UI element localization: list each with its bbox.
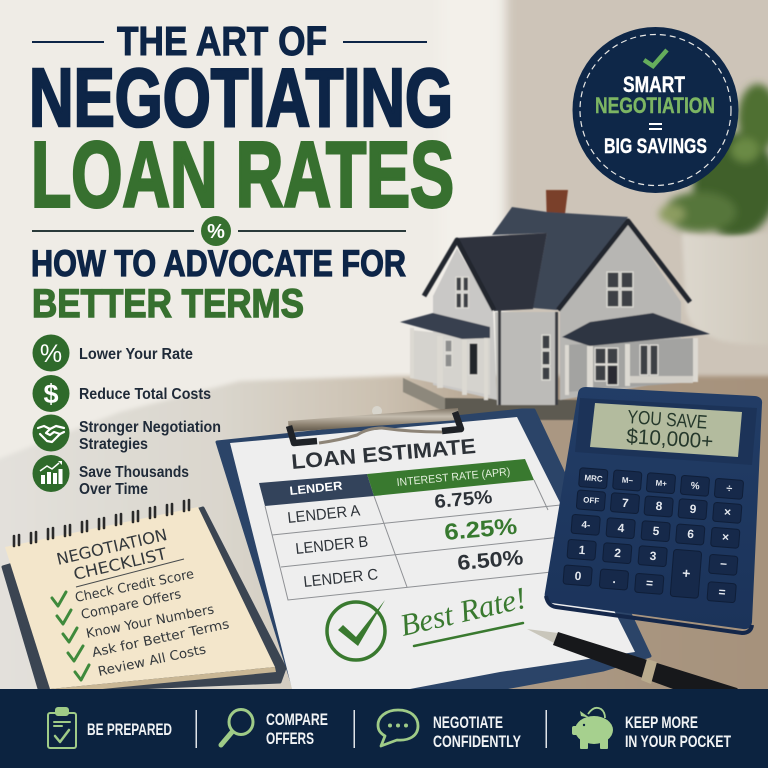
checklist check marks <box>52 592 89 680</box>
house: walls <box>433 248 497 400</box>
icon: green check circle <box>327 600 385 660</box>
icon: handshake <box>38 426 64 442</box>
house: windows <box>445 272 658 385</box>
calculator keys <box>563 468 744 603</box>
benefits list <box>32 334 221 498</box>
house: right porch roof <box>562 313 710 346</box>
model house <box>400 190 710 420</box>
checklist items: Ask for Better Terms <box>91 617 231 661</box>
calculator <box>545 387 762 633</box>
benefit: stronger negotiation strategies: Stronger Negotiation <box>79 419 221 436</box>
icon: badge check <box>644 50 667 66</box>
notepad heading: CHECKLIST <box>72 544 169 584</box>
benefit: reduce total costs: Reduce Total Costs <box>79 386 211 403</box>
benefit: lower your rate: % <box>40 340 62 368</box>
percent divider <box>32 216 406 246</box>
banner item: be prepared <box>48 708 172 748</box>
row: lender c: 6.50% <box>456 546 525 575</box>
badge text: BIG SAVINGS <box>604 135 707 158</box>
banner item: negotiate confidently <box>378 710 521 751</box>
benefit: save thousands over time: Over Time <box>79 481 148 498</box>
calculator screen: $10,000+ <box>626 425 714 453</box>
badge text <box>595 72 715 158</box>
row: lender b: LENDER B <box>295 533 369 558</box>
calculator screen <box>590 403 742 457</box>
calculator key labels: − <box>720 557 728 571</box>
best rate label: Best Rate! <box>397 580 529 643</box>
row: lender b: 6.25% <box>443 513 518 545</box>
badge: smart negotiation equals big savings <box>572 27 738 193</box>
title line 2: NEGOTIATING <box>29 51 453 144</box>
house: left porch roof <box>400 313 490 339</box>
banner item: compare offers: OFFERS <box>266 729 314 748</box>
icon: growth chart <box>40 461 62 484</box>
house: right porch wall <box>565 338 693 392</box>
house: chimney <box>546 190 568 228</box>
calculator key labels: 7 <box>621 496 630 510</box>
benefit: save thousands over time: Save Thousands <box>79 464 189 481</box>
calculator key labels: % <box>690 481 700 492</box>
calculator key labels: MRC <box>584 473 603 484</box>
calculator key labels: 5 <box>652 524 660 538</box>
rate header text: INTEREST RATE (APR) <box>396 466 511 489</box>
title block <box>29 18 454 326</box>
notepad <box>3 500 285 694</box>
checklist items: Check Credit Score <box>74 567 195 606</box>
house: roof edges <box>424 221 690 310</box>
banner item: negotiate confidently: NEGOTIATE <box>433 713 503 732</box>
checklist items <box>74 567 231 680</box>
clipboard <box>217 406 650 689</box>
benefit: stronger negotiation strategies <box>32 414 221 453</box>
row: lender b <box>295 513 518 558</box>
calculator display bezel <box>575 398 757 465</box>
icon: speech bubble <box>378 710 418 746</box>
calculator key labels: 4 <box>617 521 625 535</box>
benefit: lower your rate <box>32 334 193 372</box>
calculator key labels: 1 <box>578 543 586 557</box>
rate comparison table <box>259 459 580 600</box>
icon: magnifier <box>221 710 253 745</box>
calculator key labels: = <box>718 585 726 599</box>
notepad paper <box>5 507 275 689</box>
calculator key labels: . <box>612 572 617 586</box>
checklist items: Review All Costs <box>97 642 208 680</box>
banner item: negotiate confidently: CONFIDENTLY <box>433 732 521 751</box>
percent divider: % <box>207 221 225 243</box>
house: back roof <box>492 207 628 310</box>
notepad heading <box>55 525 184 587</box>
clipboard board <box>217 410 650 689</box>
calculator key labels: × <box>722 530 730 544</box>
banner item: compare offers: COMPARE <box>266 710 328 729</box>
heading: loan estimate: LOAN ESTIMATE <box>290 435 477 474</box>
title line 3: LOAN RATES <box>31 122 454 226</box>
plant and pot <box>659 84 768 345</box>
calculator key labels: + <box>682 565 691 581</box>
calculator key labels <box>574 473 733 599</box>
row: lender a <box>287 487 493 527</box>
calculator key labels: 9 <box>689 502 697 516</box>
banner item: keep more in your pocket: KEEP MORE <box>625 713 698 732</box>
house: left roof <box>457 233 547 311</box>
subtitle line 2: BETTER TERMS <box>32 282 304 326</box>
benefit: save thousands over time <box>32 455 189 498</box>
subtitle line 1: HOW TO ADVOCATE FOR <box>31 243 406 284</box>
house: left porch wall <box>410 330 490 395</box>
notepad spiral rings <box>14 500 189 546</box>
calculator key labels: OFF <box>583 495 600 506</box>
calculator key labels: 8 <box>655 499 663 513</box>
notepad heading: NEGOTIATION <box>55 525 169 569</box>
banner item: compare offers <box>221 710 328 748</box>
calculator key labels: 3 <box>649 549 657 563</box>
icon: clipboard <box>48 708 76 748</box>
bottom banner <box>0 689 768 768</box>
checklist items: Compare Offers <box>80 587 183 623</box>
calculator key labels: × <box>724 505 732 519</box>
calculator body <box>545 387 762 629</box>
calculator key labels: 2 <box>614 546 622 560</box>
calculator key labels: ÷ <box>726 483 733 495</box>
banner item: be prepared: BE PREPARED <box>87 720 172 739</box>
title line 1: THE ART OF <box>117 18 327 64</box>
table header: lender <box>259 474 374 506</box>
calculator key labels: M+ <box>655 479 668 488</box>
loan estimate paper <box>230 417 635 689</box>
benefit: reduce total costs <box>32 375 211 412</box>
banner item: keep more in your pocket <box>572 708 731 751</box>
calculator key labels: = <box>646 576 654 590</box>
benefit: stronger negotiation strategies: Strategies <box>79 436 148 453</box>
banner item: keep more in your pocket: IN YOUR POCKET <box>625 732 731 751</box>
badge text: NEGOTIATION <box>595 93 715 118</box>
icon: piggy bank <box>572 708 613 749</box>
row: lender c: LENDER C <box>303 566 379 591</box>
calculator key labels: 4- <box>581 520 591 531</box>
benefit: lower your rate: Lower Your Rate <box>79 346 193 363</box>
row: lender a: 6.75% <box>434 487 493 513</box>
notepad back cover <box>3 508 285 692</box>
clipboard clip <box>288 406 461 443</box>
house: base <box>403 378 580 420</box>
lender header text: LENDER <box>289 478 343 498</box>
benefit: reduce total costs: $ <box>43 379 59 409</box>
pen <box>527 629 738 689</box>
checklist items: Know Your Numbers <box>85 602 216 642</box>
calculator screen: YOU SAVE <box>627 407 708 434</box>
row: lender a: LENDER A <box>287 502 362 527</box>
badge text: SMART <box>623 72 685 97</box>
calculator key labels: 0 <box>574 569 582 583</box>
calculator key labels: M− <box>621 476 634 485</box>
table header: rate <box>367 459 534 496</box>
row: lender c <box>303 546 525 591</box>
house: porch posts <box>410 328 698 400</box>
calculator key labels: 6 <box>687 527 695 541</box>
